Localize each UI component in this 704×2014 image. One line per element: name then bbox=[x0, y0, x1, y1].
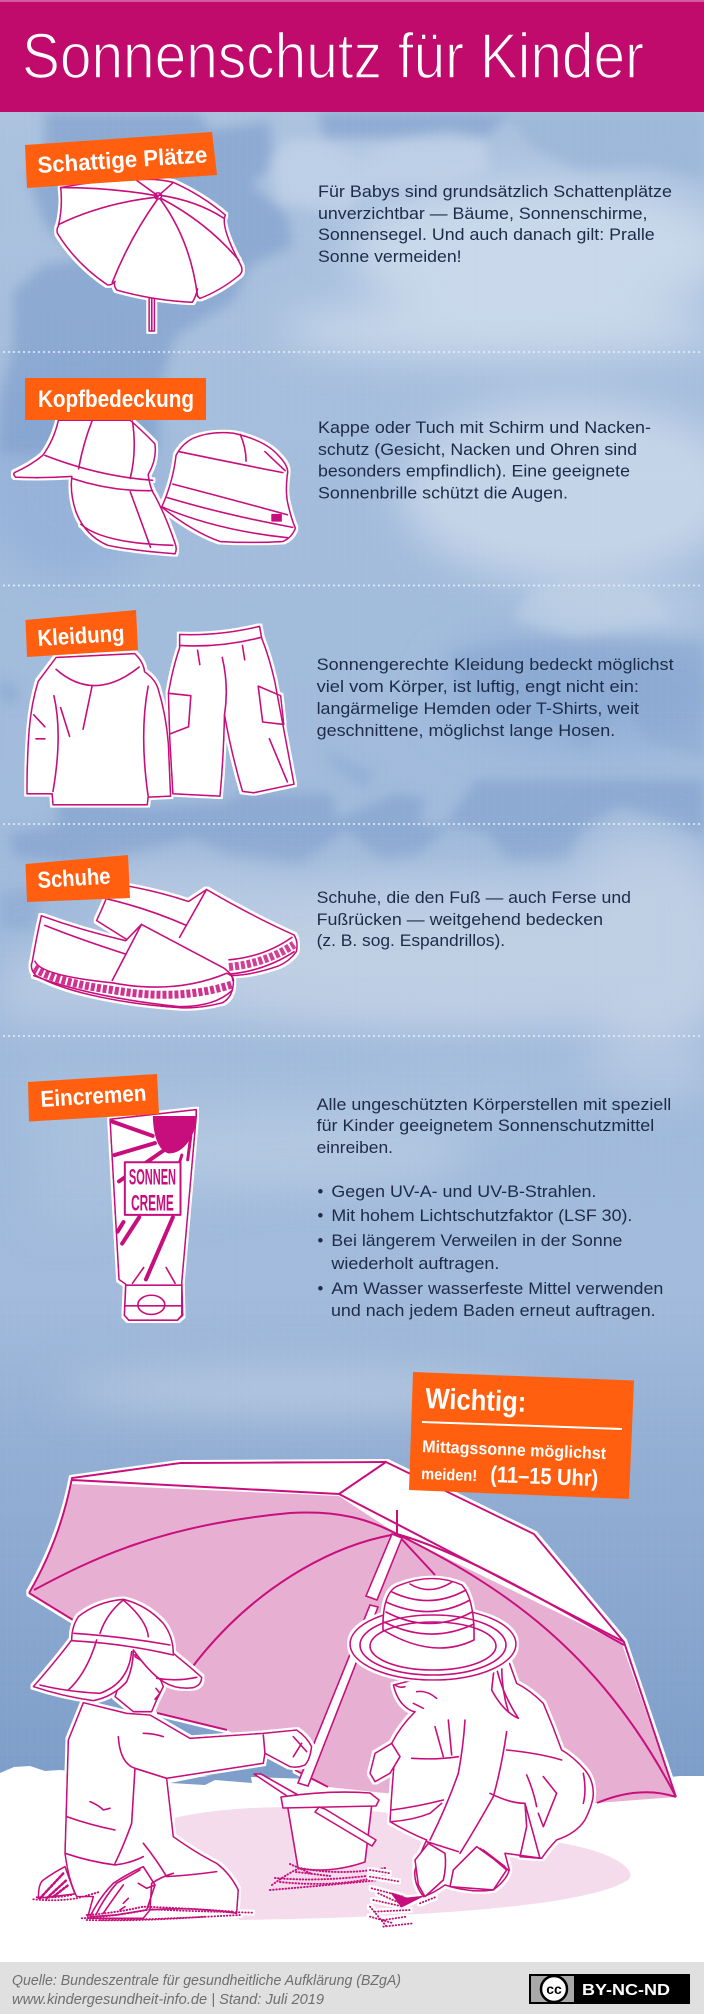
callout: Wichtig: Wichtig: bbox=[425, 1383, 527, 1419]
text: Schattige Plätze: Sonne vermeiden! bbox=[318, 247, 462, 266]
panel: Eincremen bbox=[28, 1074, 671, 1320]
label: Schuhe bbox=[26, 855, 130, 902]
label: Schattige Plätze bbox=[25, 132, 217, 188]
illustration: child right bbox=[350, 1578, 593, 1927]
text: Kopfbedeckung: Kappe oder Tuch mit Schirm und Nacken- bbox=[318, 418, 651, 437]
illustration: child left bbox=[33, 1599, 312, 1920]
text: Eincremen: einreiben. bbox=[317, 1138, 393, 1157]
illustration: bucket bbox=[254, 1774, 385, 1890]
text: Eincremen bbox=[317, 1095, 671, 1320]
label: Eincremen bbox=[28, 1074, 159, 1122]
text: Schattige Plätze: Sonnensegel. Und auch danach gilt: Pralle bbox=[318, 225, 655, 244]
icon: hoodie and trousers bbox=[27, 626, 294, 805]
bullet list: • bbox=[318, 1279, 324, 1298]
text: Kleidung: geschnittene, möglichst lange Hosen. bbox=[317, 721, 615, 740]
text: Schattige Plätze: unverzichtbar — Bäume, Sonnenschirme, bbox=[318, 204, 648, 223]
label: Kleidung bbox=[26, 610, 138, 657]
bullet list: • bbox=[318, 1206, 324, 1225]
sky seen under the arm bbox=[158, 1720, 297, 1785]
footer bbox=[0, 1962, 704, 2014]
text: Kopfbedeckung: besonders empfindlich). Eine geeignete bbox=[318, 462, 630, 480]
title bar bbox=[0, 0, 704, 112]
tube label text: SONNEN bbox=[129, 1165, 176, 1190]
text: Kopfbedeckung: schutz (Gesicht, Nacken und Ohren sind bbox=[318, 440, 637, 459]
source text bbox=[12, 1972, 401, 2008]
licence badge: BY-NC-ND bbox=[582, 1982, 670, 1999]
icon: parasol bbox=[57, 179, 242, 331]
label: Kleidung: Kleidung bbox=[37, 620, 125, 651]
licence badge bbox=[529, 1974, 690, 2004]
bullet list: Mit hohem Lichtschutzfaktor (LSF 30). bbox=[331, 1206, 632, 1225]
icon: sunscreen tube bbox=[110, 1110, 196, 1320]
label: Eincremen: Eincremen bbox=[40, 1080, 147, 1112]
bullet list: und nach jedem Baden erneut auftragen. bbox=[331, 1301, 656, 1320]
callout: Wichtig: meiden! bbox=[421, 1466, 477, 1485]
parasol ribs bbox=[34, 1510, 676, 1797]
text: Schuhe: Fußrücken — weitgehend bedecken bbox=[317, 910, 603, 929]
straw hat bbox=[350, 1578, 516, 1680]
text: Schattige Plätze: Für Babys sind grundsätzlich Schattenplätze bbox=[318, 182, 672, 201]
dotted dividers bbox=[4, 352, 704, 1036]
panel: Kleidung bbox=[26, 610, 674, 805]
icon: hats bbox=[14, 420, 295, 554]
icon: espadrilles bbox=[31, 883, 297, 1008]
bullet list: Gegen UV-A- und UV-B-Strahlen. bbox=[331, 1182, 596, 1201]
text: Eincremen: Alle ungeschützten Körperstellen mit speziell bbox=[317, 1095, 671, 1114]
title: Sonnenschutz für Kinder bbox=[22, 20, 644, 92]
text: Kleidung bbox=[317, 655, 674, 740]
text: Schattige Plätze bbox=[318, 182, 672, 266]
bullet list: • bbox=[318, 1182, 324, 1201]
text: Kopfbedeckung bbox=[318, 418, 651, 502]
tube label text bbox=[129, 1165, 176, 1216]
label: Kopfbedeckung: Kopfbedeckung bbox=[38, 386, 194, 413]
label: Kopfbedeckung bbox=[25, 378, 206, 420]
text: Schuhe bbox=[317, 888, 631, 950]
source text: Quelle: Bundeszentrale für gesundheitliche Aufklärung (BZgA) bbox=[12, 1972, 401, 1989]
licence badge: cc bbox=[546, 1981, 562, 1997]
label: Schattige Plätze: Schattige Plätze bbox=[37, 141, 208, 178]
text: Kopfbedeckung: Sonnenbrille schützt die Augen. bbox=[318, 484, 568, 502]
bullet list: wiederholt auftragen. bbox=[330, 1254, 499, 1273]
callout: Wichtig bbox=[409, 1372, 634, 1499]
tube label text: CREME bbox=[131, 1191, 174, 1216]
text: Eincremen: für Kinder geeignetem Sonnenschutzmittel bbox=[317, 1116, 654, 1135]
bullet list: • bbox=[318, 1231, 324, 1250]
text: Schuhe: (z. B. sog. Espandrillos). bbox=[317, 931, 505, 950]
parasol pole bbox=[298, 1534, 402, 1786]
ground: white sand bbox=[0, 1766, 704, 1962]
source text: www.kindergesundheit-info.de | Stand: Juli 2019 bbox=[12, 1991, 325, 2008]
text: Kleidung: viel vom Körper, ist luftig, engt nicht ein: bbox=[317, 677, 639, 696]
callout: Wichtig: (11–15 Uhr) bbox=[490, 1461, 599, 1491]
bullet list bbox=[318, 1182, 663, 1320]
panel: Schuhe bbox=[26, 855, 631, 1008]
panel: Kopfbedeckung bbox=[14, 378, 651, 554]
label: Schuhe: Schuhe bbox=[37, 863, 111, 893]
bullet list: Bei längerem Verweilen in der Sonne bbox=[331, 1231, 622, 1250]
illustration: big parasol bbox=[29, 1462, 676, 1803]
text: Schuhe: Schuhe, die den Fuß — auch Ferse und bbox=[317, 888, 631, 907]
text: Kleidung: Sonnengerechte Kleidung bedeckt möglichst bbox=[317, 655, 674, 674]
callout: Wichtig: Mittagssonne möglichst bbox=[422, 1437, 607, 1463]
bullet list: Am Wasser wasserfeste Mittel verwenden bbox=[331, 1279, 663, 1298]
text: Kleidung: langärmelige Hemden oder T-Shirts, weit bbox=[317, 699, 639, 718]
panel: Schattige Plätze bbox=[25, 132, 672, 331]
sand shadow bbox=[174, 1807, 631, 1920]
